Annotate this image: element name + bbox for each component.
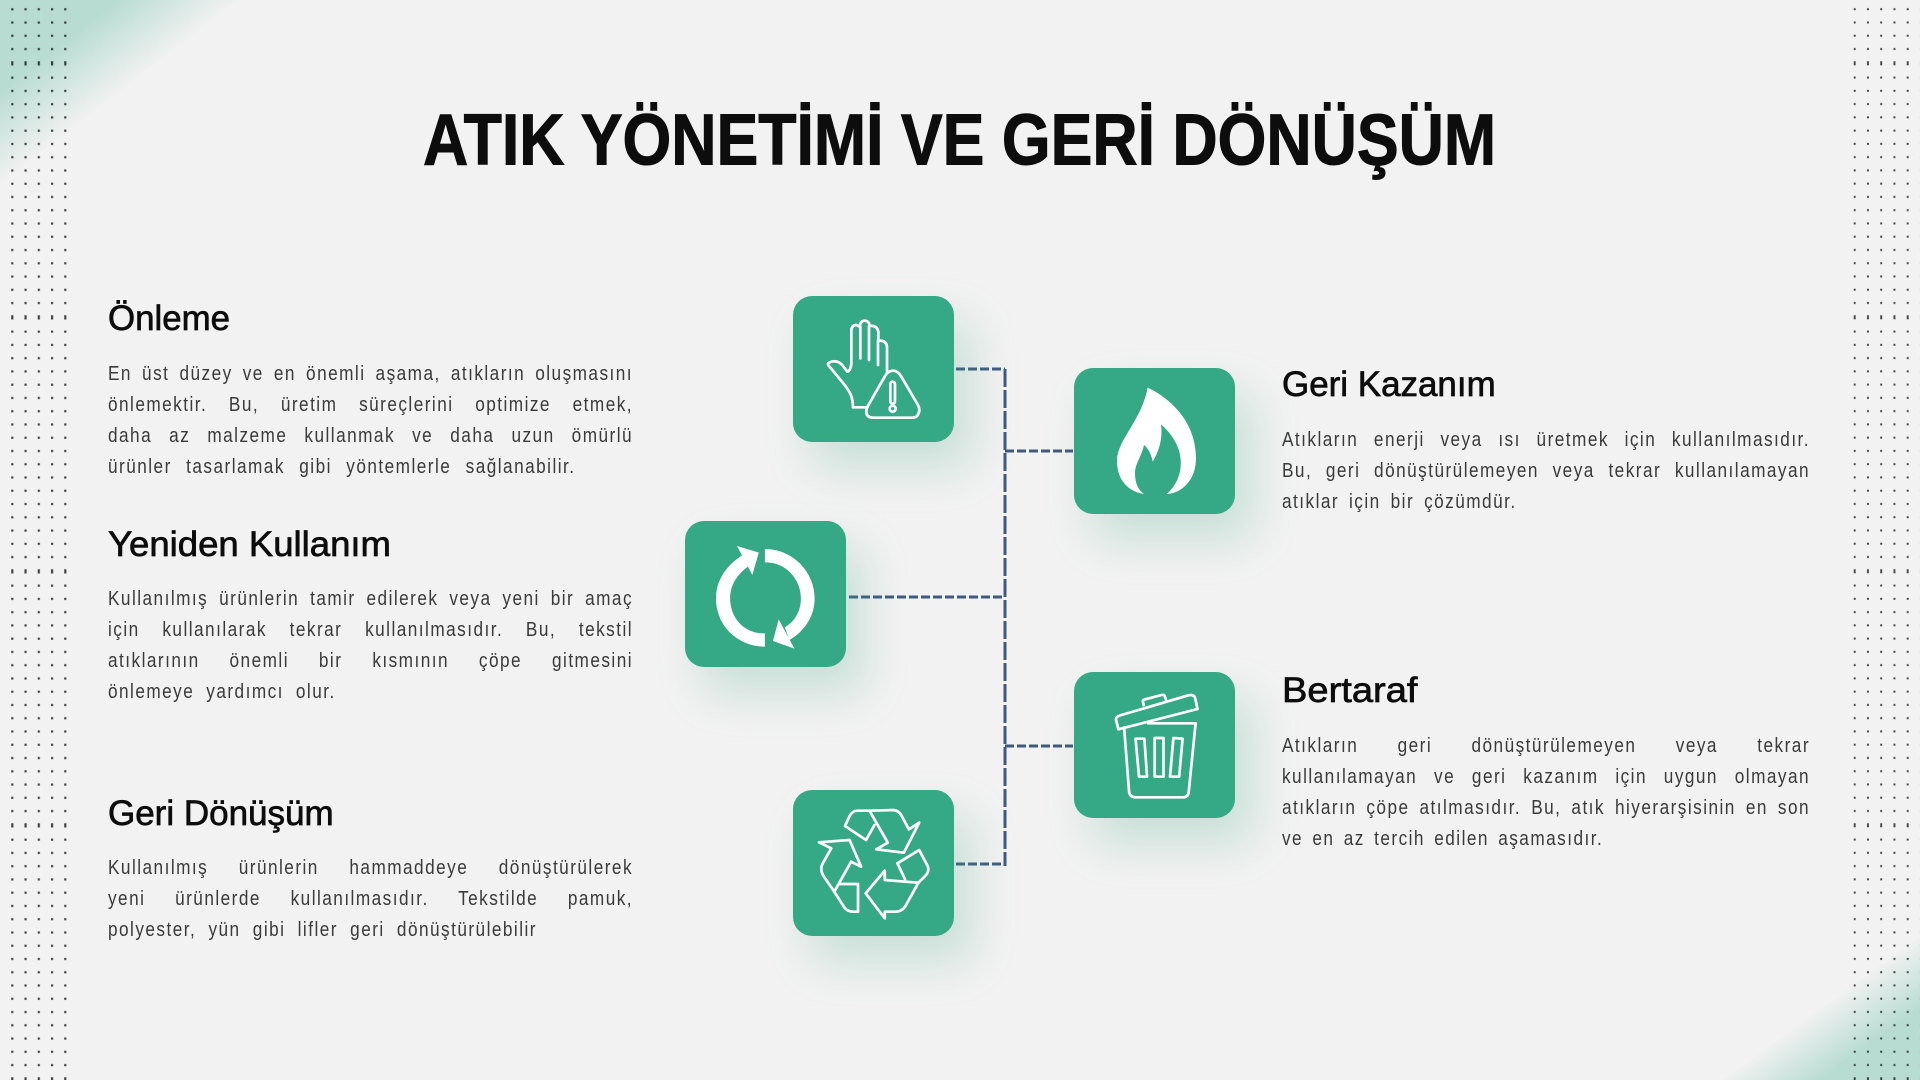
text block: Geri Kazanım: Atıkların enerji veya ısı üretmek için kullanılmasıdır. <box>1282 429 1810 451</box>
text block: Bertaraf: atıkların çöpe atılmasıdır. Bu, atık hiyerarşisinin en son <box>1282 797 1810 819</box>
text block: Geri Dönüşüm: polyester, yün gibi lifler geri dönüştürülebilir <box>108 919 537 941</box>
corner gradient: top left <box>0 0 300 300</box>
icon: trash can <box>1114 694 1199 799</box>
heading: Geri Dönüşüm: Geri Dönüşüm <box>108 794 334 833</box>
text block: Önleme: En üst düzey ve en önemli aşama, atıkların oluşmasını <box>108 363 633 385</box>
text block: Geri Kazanım: atıklar için bir çözümdür. <box>1282 491 1517 513</box>
corner gradient: bottom right <box>1620 780 1920 1080</box>
panel: Yeniden Kullanım <box>108 525 633 703</box>
heading: Geri Kazanım: Geri Kazanım <box>1282 365 1496 404</box>
title: ATIK YÖNETİMİ VE GERİ DÖNÜŞÜM <box>423 101 1496 181</box>
panel: Önleme <box>108 299 633 478</box>
heading: Önleme: Önleme <box>108 299 230 338</box>
icon: recycling arrows <box>818 808 930 920</box>
text block: Geri Dönüşüm <box>108 857 633 941</box>
panel: Geri Kazanım <box>1282 365 1810 513</box>
text block: Önleme <box>108 363 633 478</box>
icon: hand with warning <box>826 319 921 419</box>
text block: Geri Kazanım: Bu, geri dönüştürülemeyen veya tekrar kullanılamayan <box>1282 460 1810 482</box>
card: hand and warning icon <box>793 296 954 442</box>
text block: Geri Dönüşüm: yeni ürünlerde kullanılmasıdır. Tekstilde pamuk, <box>108 888 633 910</box>
icon: flame <box>1117 388 1196 494</box>
card: recycle icon <box>793 790 954 936</box>
text block: Yeniden Kullanım <box>108 588 633 703</box>
card: flame icon <box>1074 368 1235 514</box>
text block: Geri Kazanım <box>1282 429 1810 513</box>
heading: Bertaraf: Bertaraf <box>1282 671 1418 710</box>
text block: Yeniden Kullanım: Kullanılmış ürünlerin tamir edilerek veya yeni bir amaç <box>108 588 633 610</box>
text block: Yeniden Kullanım: atıklarının önemli bir kısmının çöpe gitmesini <box>108 650 633 672</box>
panel: Bertaraf <box>1282 671 1810 850</box>
card: trash icon <box>1074 672 1235 818</box>
text block: Önleme: ürünler tasarlamak gibi yöntemlerle sağlanabilir. <box>108 456 575 478</box>
text block: Yeniden Kullanım: için kullanılarak tekrar kullanılmasıdır. Bu, tekstil <box>108 619 633 641</box>
text block: Yeniden Kullanım: önlemeye yardımcı olur. <box>108 681 336 703</box>
card: refresh icon <box>685 521 846 667</box>
text block: Önleme: daha az malzeme kullanmak ve daha uzun ömürlü <box>108 425 633 447</box>
heading: Yeniden Kullanım: Yeniden Kullanım <box>108 525 391 564</box>
text block: Bertaraf: ve en az tercih edilen aşamasıdır. <box>1282 828 1603 850</box>
text block: Önleme: önlemektir. Bu, üretim süreçlerini optimize etmek, <box>108 394 633 416</box>
text block: Bertaraf <box>1282 735 1810 850</box>
text block: Bertaraf: kullanılamayan ve geri kazanım için uygun olmayan <box>1282 766 1810 788</box>
panel: Geri Dönüşüm <box>108 794 633 941</box>
icon: circular arrows <box>716 546 815 649</box>
text block: Geri Dönüşüm: Kullanılmış ürünlerin hammaddeye dönüştürülerek <box>108 857 633 879</box>
text block: Bertaraf: Atıkların geri dönüştürülemeyen veya tekrar <box>1282 735 1810 757</box>
